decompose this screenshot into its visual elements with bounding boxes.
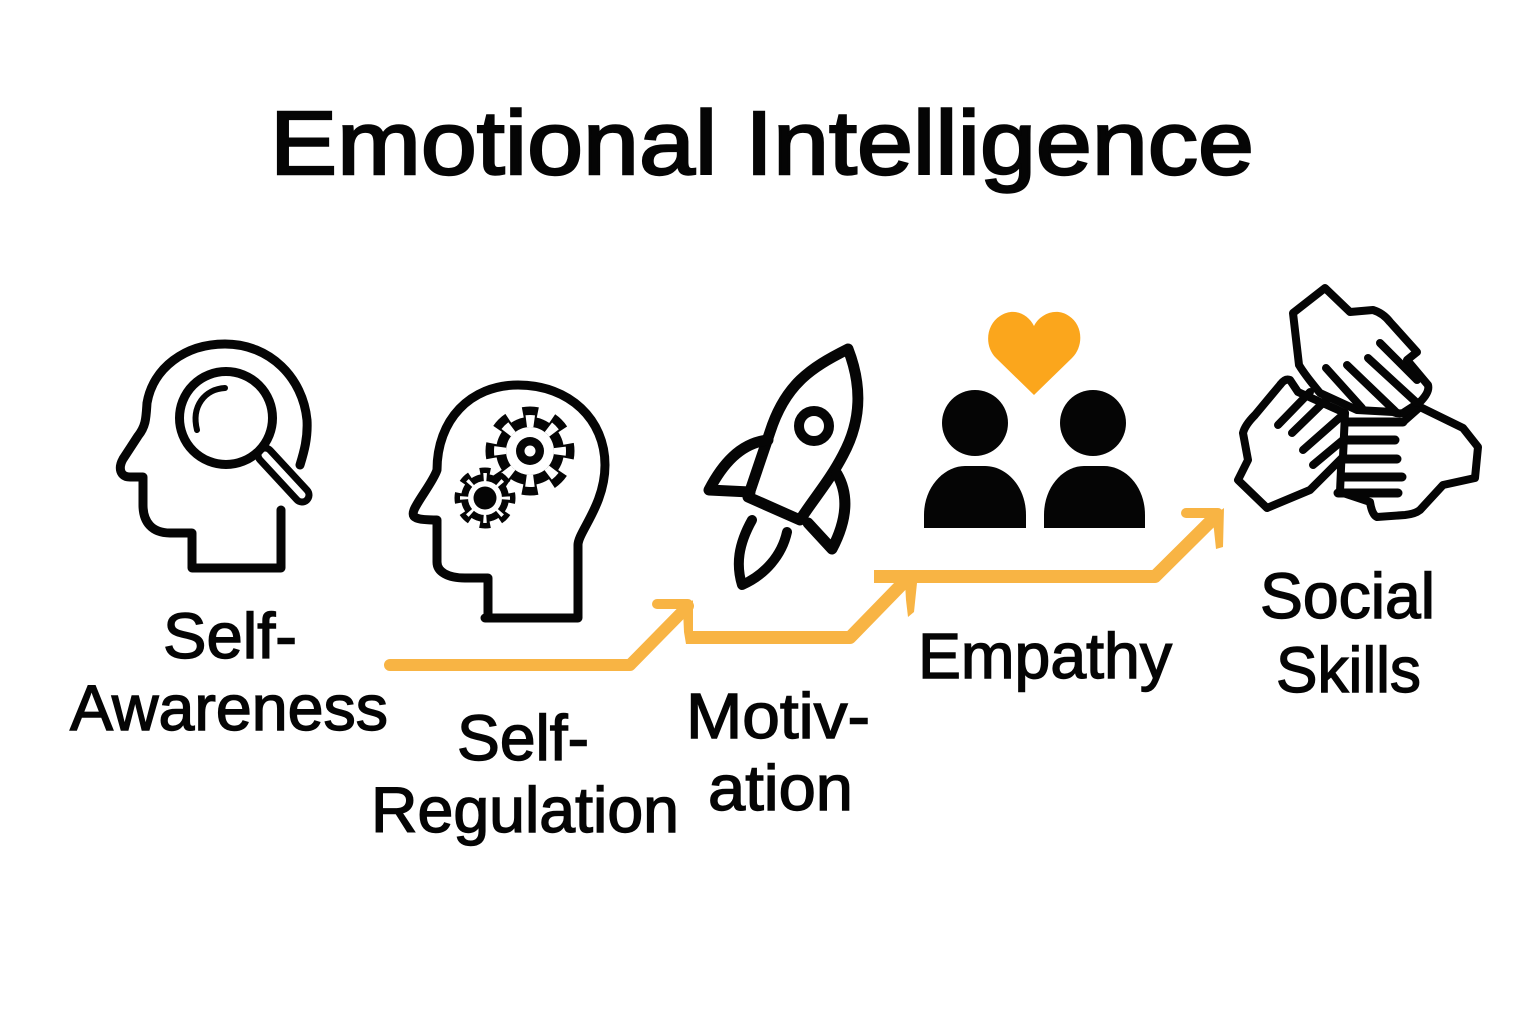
icon: head with magnifying glass <box>120 344 307 568</box>
label: Empathy: Empathy <box>918 620 1172 692</box>
large gear <box>491 412 569 490</box>
label: Self-Awareness <box>70 600 388 744</box>
label: Self-Regulation: Regulation <box>371 774 679 846</box>
icon: three joined hands <box>1238 288 1478 517</box>
label: Motivation: Motiv- <box>686 680 870 752</box>
label: Social Skills <box>1260 560 1435 706</box>
title: Emotional Intelligence <box>270 94 1254 194</box>
label: Self-Awareness: Awareness <box>70 672 388 744</box>
icon: two people <box>924 390 1145 528</box>
label: Social Skills: Social <box>1260 560 1435 632</box>
arrow: rising progress line <box>390 508 1224 665</box>
icon: head with gears <box>413 385 605 618</box>
label: Self-Regulation: Self- <box>457 702 589 774</box>
label: Social Skills: Skills <box>1276 634 1421 706</box>
icon: rocket <box>709 349 858 585</box>
icon: heart <box>988 312 1080 395</box>
label: Motivation <box>686 680 870 824</box>
small gear <box>459 472 511 524</box>
label: Self-Regulation <box>371 702 679 846</box>
label: Motivation: ation <box>708 752 853 824</box>
label: Self-Awareness: Self- <box>163 600 297 672</box>
